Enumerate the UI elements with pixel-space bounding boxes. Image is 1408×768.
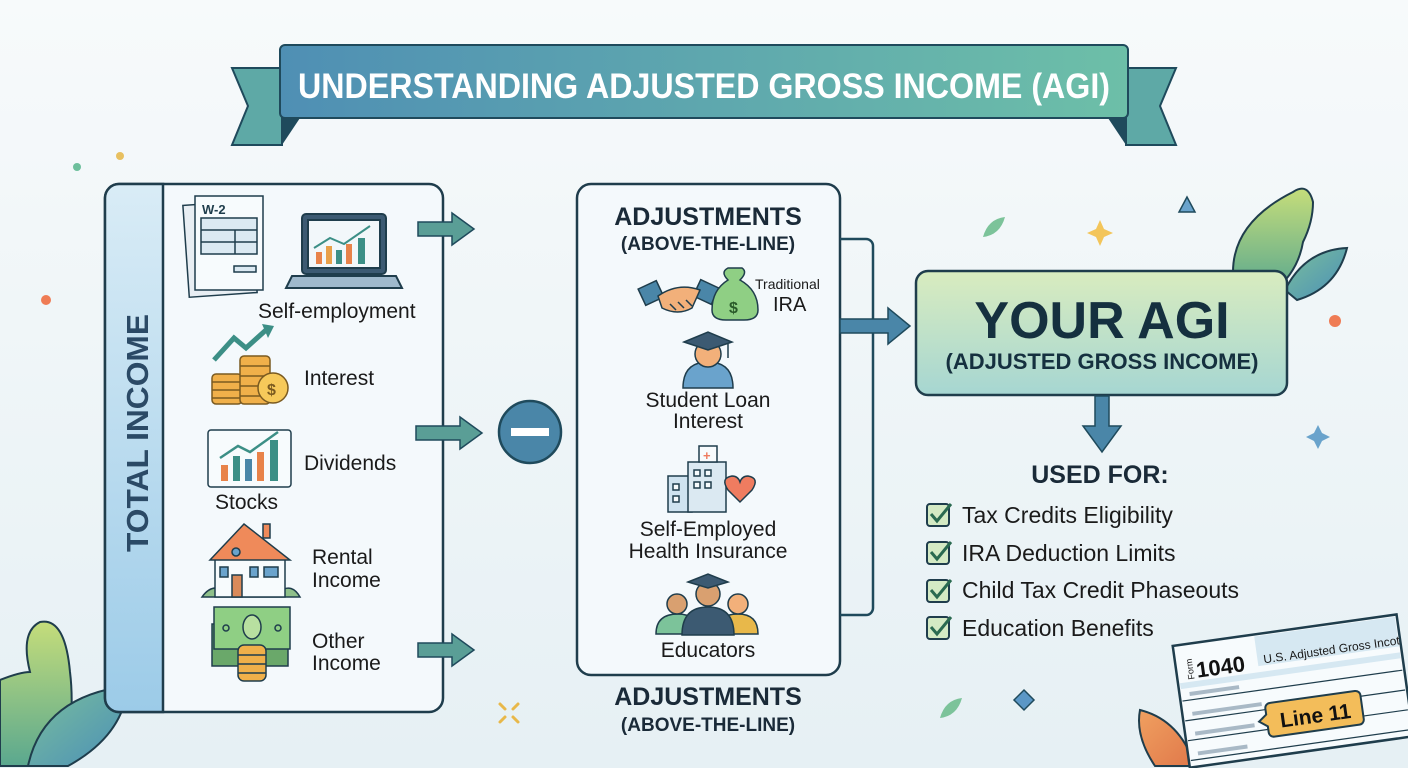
panel: adjustments: [577, 184, 840, 675]
panel: adjustments: $: [729, 300, 738, 317]
form 1040: [1173, 614, 1408, 768]
text: educators: Educators: [661, 639, 755, 662]
arrow: down: [1083, 396, 1121, 452]
panel: adjustments: IRA: [773, 294, 807, 316]
icon: W-2 form: [183, 196, 263, 297]
panel: your AGI: YOUR AGI: [974, 292, 1230, 350]
text: rental income: Rental: [312, 546, 373, 569]
title text: UNDERSTANDING ADJUSTED GROSS INCOME (AGI): [298, 67, 1110, 106]
icon: minus circle: [499, 401, 561, 463]
text: self-employment: Self-employment: [258, 300, 416, 323]
panel: adjustments: (ABOVE-THE-LINE): [621, 234, 795, 255]
icon: educators: [656, 574, 758, 635]
leaves top-right: [1233, 189, 1347, 300]
icon: student: [683, 332, 733, 388]
icon: coins interest: [212, 324, 288, 404]
title banner: [232, 45, 1176, 145]
panel: total income: W-2: [202, 202, 226, 217]
panel: total income: $: [267, 382, 276, 399]
checklist: IRA Deduction Limits: [962, 540, 1175, 566]
leaves bottom-left: [0, 622, 128, 766]
arrow: bottom: [418, 634, 474, 666]
icon: house: [202, 524, 300, 597]
panel: total income: Income: [312, 569, 381, 592]
bracket and arrow to AGI: [840, 239, 910, 615]
text: other income: Other: [312, 630, 365, 653]
checklist: Child Tax Credit Phaseouts: [962, 577, 1239, 603]
text: traditional ira: Traditional: [755, 276, 820, 292]
panel: your AGI: (ADJUSTED GROSS INCOME): [946, 349, 1258, 374]
form 1040: 1040: [1195, 651, 1247, 683]
panel: adjustments: Interest: [673, 410, 743, 433]
panel: your AGI: [916, 271, 1287, 395]
heading: adjustments: ADJUSTMENTS: [614, 203, 802, 231]
panel: adjustments: +: [703, 448, 711, 463]
caption: adjustments below: ADJUSTMENTS: [614, 683, 802, 711]
callout: line 11: Line 11: [1279, 700, 1353, 733]
icon: money: [212, 607, 290, 681]
checklist: Education Benefits: [962, 615, 1154, 641]
checklist: [927, 502, 1239, 641]
icon: handshake and money bag: [638, 268, 758, 320]
heading: used for: USED FOR:: [1031, 461, 1169, 489]
heading: total income: TOTAL INCOME: [120, 314, 155, 552]
icon: laptop: [286, 214, 402, 288]
arrow: top: [418, 213, 474, 245]
callout: line 11: [1257, 690, 1364, 738]
decorative dots: [41, 152, 1341, 722]
checklist: Tax Credits Eligibility: [962, 502, 1173, 528]
text: self-employed health insurance: Self-Employed: [640, 518, 776, 541]
caption: adjustments below: [614, 683, 802, 736]
icon: stocks chart: [208, 430, 291, 487]
text: stocks: Stocks: [215, 491, 278, 514]
panel: total income: Income: [312, 652, 381, 675]
text: dividends: Dividends: [304, 452, 396, 475]
text: student loan interest: Student Loan: [646, 389, 770, 412]
caption: adjustments below: (ABOVE-THE-LINE): [621, 715, 795, 736]
form 1040: U.S. Adjusted Gross Incot: [1263, 633, 1401, 666]
leaf: orange: [1139, 710, 1195, 766]
icon: hospital: [668, 446, 755, 512]
panel: total income: [105, 184, 443, 712]
panel: adjustments: Health Insurance: [629, 540, 787, 563]
arrow: middle: [416, 417, 482, 449]
form 1040: Form: [1184, 658, 1197, 680]
text: interest: Interest: [304, 367, 374, 390]
